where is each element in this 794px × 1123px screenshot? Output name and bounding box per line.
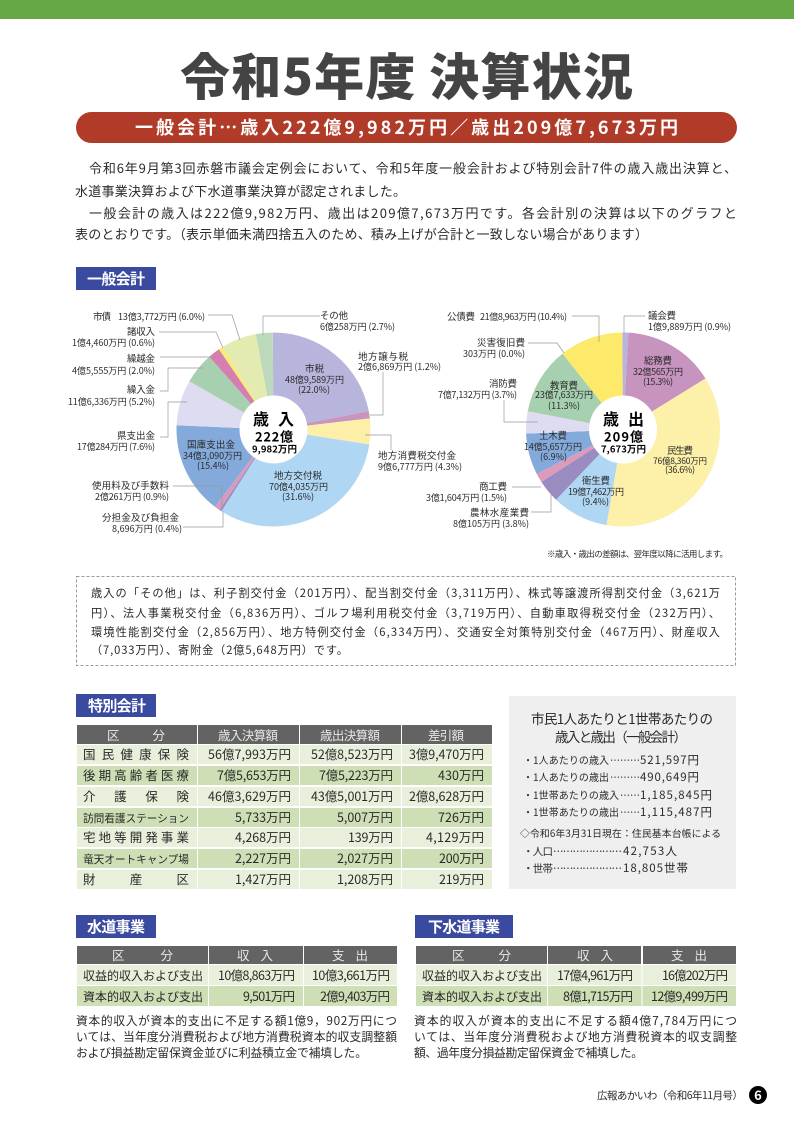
expenditure labels: 8億105万円 (3.8%)	[453, 517, 529, 530]
table: special accounts: 宅 地 等 開 発 事 業	[83, 827, 189, 846]
expenditure labels: 303万円 (0.0%)	[463, 347, 525, 360]
expenditure labels: 農林水産業費	[470, 505, 529, 519]
table: special accounts: 4,129万円	[426, 827, 484, 846]
table: special accounts: 区 分	[107, 725, 165, 744]
table: special accounts: 219万円	[439, 869, 484, 888]
table: special accounts: 国 民 健 康 保 険	[83, 744, 189, 763]
note box: other revenue: 環境性能割交付金（2,856万円）、地方特例交付金（6,334万円）、交通安全対策特別交付金（467万円）、財産収入	[91, 624, 720, 640]
table: water works	[77, 945, 397, 1006]
expenditure labels	[426, 308, 731, 530]
panel: per capita figures: ……	[620, 787, 640, 802]
sewer works note: 資本的収入が資本的支出に不足する額4億7,784万円につ	[414, 1012, 737, 1029]
expenditure labels: (15.3%)	[643, 375, 673, 388]
panel: per capita figures: ・1世帯あたりの歳出	[523, 804, 619, 819]
panel: per capita figures: …………………	[553, 861, 622, 876]
table: water works: 9,501万円	[243, 986, 295, 1005]
table: special accounts: 43億5,001万円	[311, 786, 393, 805]
panel: per capita figures: 歳入と歳出（一般会計）	[555, 726, 687, 746]
revenue labels: 市債	[93, 309, 111, 323]
table: special accounts: 52億8,523万円	[311, 744, 393, 763]
panel: per capita figures: ・1人あたりの歳出	[523, 769, 609, 784]
expenditure labels: 3億1,604万円 (1.5%)	[426, 491, 507, 504]
expenditure labels: 教育費	[550, 378, 578, 392]
expenditure labels: 76億8,360万円	[653, 455, 707, 467]
table: water works: 10億8,863万円	[218, 965, 295, 984]
revenue labels: その他	[320, 308, 348, 322]
table: sewer works: 17億4,961万円	[557, 965, 633, 984]
intro text	[75, 158, 737, 243]
intro text: 令和6年9月第3回赤磐市議会定例会において、令和5年度一般会計および特別会計7件の歳入歳出決算と、	[89, 158, 737, 177]
revenue labels: 9億6,777万円 (4.3%)	[378, 460, 462, 473]
expenditure labels: 32億565万円	[633, 365, 683, 378]
table: special accounts: 56億7,993万円	[208, 744, 291, 763]
revenue centre total: 歳 入	[253, 406, 294, 430]
expenditure centre total	[601, 406, 646, 456]
table: water works: 収 入	[237, 945, 273, 964]
panel: per capita figures: 42,753人	[623, 843, 678, 859]
panel: per capita figures	[509, 696, 736, 889]
revenue labels: 繰越金	[127, 351, 155, 365]
table: water works: 区 分	[112, 945, 173, 964]
expenditure labels: 公債費	[447, 309, 475, 323]
expenditure labels: 議会費	[648, 308, 676, 322]
revenue labels: 34億3,090万円	[183, 449, 242, 462]
expenditure labels: 21億8,963万円 (10.4%)	[480, 310, 567, 323]
table: sewer works: 区 分	[452, 945, 511, 964]
intro text: 表のとおりです。（表示単価未満四捨五入のため、積み上げが合計と一致しない場合があります）	[75, 224, 648, 243]
table: special accounts: 差引額	[428, 725, 464, 744]
revenue labels: 2億6,869万円 (1.2%)	[358, 360, 441, 373]
table: special accounts: 46億3,629万円	[208, 786, 291, 805]
panel: per capita figures: ……	[620, 804, 640, 819]
table: special accounts: 4,268万円	[235, 827, 291, 846]
heading: sewer works: 下水道事業	[428, 916, 500, 937]
revenue labels: 繰入金	[127, 382, 155, 396]
table: special accounts: 7億5,223万円	[319, 765, 393, 784]
revenue labels: 4億5,555万円 (2.0%)	[72, 364, 155, 377]
table: special accounts: 726万円	[438, 807, 484, 826]
summary banner	[76, 112, 737, 143]
water works note	[76, 1012, 397, 1061]
panel: per capita figures: …………………	[553, 844, 622, 859]
expenditure labels: 商工費	[479, 479, 507, 493]
revenue labels: 地方譲与税	[358, 349, 408, 363]
expenditure labels: 19億7,462万円	[568, 485, 624, 498]
heading: water works: 水道事業	[87, 916, 145, 937]
water works note: 資本的収入が資本的支出に不足する額1億9，902万円につ	[76, 1012, 397, 1029]
panel: per capita figures: ・1世帯あたりの歳入	[523, 787, 619, 802]
table: water works: 10億3,661万円	[312, 965, 390, 984]
heading: special accounts: 特別会計	[88, 695, 146, 716]
note box: other revenue	[76, 576, 736, 666]
revenue labels: 48億9,589万円	[285, 373, 344, 386]
top green band	[0, 0, 794, 19]
sewer works note	[414, 1012, 737, 1061]
revenue labels	[68, 308, 462, 535]
sewer works note: いては、当年度分消費税および地方消費税資本的収支調整	[414, 1028, 737, 1045]
revenue labels: (31.6%)	[282, 490, 314, 503]
heading: special accounts	[76, 694, 156, 717]
expenditure labels: 23億7,633万円	[535, 388, 593, 401]
panel: per capita figures: 1,115,487円	[640, 804, 712, 820]
heading: general account: 一般会計	[87, 268, 145, 289]
expenditure centre total: 歳 出	[603, 406, 644, 430]
table: special accounts: 200万円	[439, 848, 484, 867]
panel: per capita figures: 1,185,845円	[640, 787, 712, 803]
expenditure labels: 消防費	[489, 376, 517, 390]
expenditure labels: (9.4%)	[582, 495, 609, 508]
heading: water works	[76, 915, 156, 938]
panel: per capita figures: ………	[610, 752, 640, 767]
table: special accounts: 2億8,628万円	[409, 786, 484, 805]
table: sewer works: 8億1,715万円	[563, 986, 633, 1005]
intro text: 水道事業決算および下水道事業決算が認定されました。	[75, 181, 406, 200]
expenditure labels: (6.9%)	[540, 450, 567, 463]
table: water works: 資本的収入および支出	[83, 988, 203, 1005]
panel: per capita figures: 市民1人あたりと1世帯あたりの	[531, 708, 713, 728]
revenue labels: 1億4,460万円 (0.6%)	[72, 336, 155, 349]
expenditure labels: 7億7,132万円 (3.7%)	[438, 388, 517, 401]
expenditure centre total: 7,673万円	[601, 442, 646, 456]
revenue labels: 諸収入	[127, 324, 155, 338]
table: special accounts: 5,007万円	[337, 807, 393, 826]
expenditure labels: 1億9,889万円 (0.9%)	[648, 320, 731, 333]
heading: general account	[76, 267, 156, 290]
table: special accounts: 5,733万円	[235, 807, 291, 826]
revenue labels: 11億6,336万円 (5.2%)	[68, 395, 155, 408]
table: special accounts: 430万円	[438, 765, 484, 784]
table: special accounts: 7億5,653万円	[217, 765, 291, 784]
title: 令和5年度 決算状況	[180, 38, 633, 110]
table: special accounts: 財 産 区	[83, 869, 189, 888]
expenditure labels: (11.3%)	[548, 399, 580, 412]
page number badge	[749, 1085, 767, 1104]
water works note: いては、当年度分消費税および地方消費税資本的収支調整額	[76, 1028, 397, 1045]
revenue labels: 分担金及び負担金	[102, 510, 179, 524]
revenue labels: (15.4%)	[197, 459, 229, 472]
revenue labels: 2億261万円 (0.9%)	[95, 490, 169, 503]
panel: per capita figures: 490,649円	[640, 769, 699, 785]
expenditure labels: 土木費	[539, 428, 567, 442]
revenue leader lines	[159, 315, 391, 527]
revenue labels: 地方消費税交付金	[378, 448, 456, 462]
revenue labels: 市税	[305, 361, 324, 375]
chart footnote: ※歳入・歳出の差額は、翌年度以降に活用します。	[547, 548, 728, 560]
revenue labels: 国庫支出金	[187, 437, 235, 451]
water works note: および損益勘定留保資金並びに利益積立金で補填した。	[76, 1044, 367, 1061]
table: sewer works: 12億9,499万円	[651, 986, 728, 1005]
table: sewer works: 16億202万円	[662, 965, 728, 984]
panel: per capita figures: ◇令和6年3月31日現在：住民基本台帳による	[520, 826, 721, 840]
table: sewer works	[416, 945, 736, 1006]
summary banner: 一般会計…歳入222億9,982万円／歳出209億7,673万円	[135, 114, 678, 140]
page number badge: 6	[754, 1085, 762, 1104]
table: special accounts	[77, 725, 492, 889]
revenue labels: 70億4,035万円	[269, 480, 328, 493]
panel: per capita figures: 18,805世帯	[623, 860, 688, 876]
footer publication name: 広報あかいわ（令和6年11月号）	[597, 1088, 743, 1103]
table: water works: 支 出	[332, 945, 368, 964]
note box: other revenue: （7,033万円）、寄附金（2億5,648万円）です。	[91, 642, 348, 658]
table: special accounts: 1,208万円	[337, 869, 393, 888]
revenue labels: 6億258万円 (2.7%)	[320, 320, 395, 333]
revenue centre total: 9,982万円	[252, 442, 297, 456]
revenue labels: 8,696万円 (0.4%)	[112, 522, 182, 535]
expenditure leader lines	[504, 316, 645, 512]
panel: per capita figures: ・世帯	[523, 861, 553, 876]
table: special accounts: 1,427万円	[235, 869, 291, 888]
note box: other revenue: 歳入の「その他」は、利子割交付金（201万円）、配当割交付金（3,311万円）、株式等譲渡所得割交付金（3,621万	[91, 585, 720, 601]
table: special accounts: 139万円	[348, 827, 393, 846]
panel: per capita figures: ・人口	[523, 844, 553, 859]
table: special accounts: 3億9,470万円	[409, 744, 484, 763]
panel: per capita figures: 521,597円	[640, 752, 699, 768]
expenditure labels: 民生費	[667, 443, 693, 457]
revenue labels: 地方交付税	[274, 468, 322, 482]
table: special accounts: 訪問看護ステーション	[83, 811, 189, 826]
expenditure labels: 総務費	[644, 353, 672, 367]
table: special accounts: 2,227万円	[235, 848, 291, 867]
table: special accounts: 介 護 保 険	[83, 786, 189, 805]
revenue labels: 使用料及び手数料	[92, 478, 169, 492]
table: water works: 収益的収入および支出	[83, 967, 203, 984]
table: special accounts: 歳出決算額	[320, 725, 380, 744]
table: sewer works: 支 出	[671, 945, 707, 964]
table: special accounts: 2,027万円	[337, 848, 393, 867]
table: special accounts: 後 期 高 齢 者 医 療	[83, 765, 189, 784]
intro text: 一般会計の歳入は222億9,982万円、歳出は209億7,673万円です。各会計別の決算は以下のグラフと	[89, 203, 737, 222]
revenue labels: 13億3,772万円 (6.0%)	[118, 310, 205, 323]
revenue labels: (22.0%)	[298, 383, 330, 396]
expenditure labels: 衛生費	[582, 473, 610, 487]
note box: other revenue: 円）、法人事業税交付金（6,836万円）、ゴルフ場利用税交付金（3,719万円）、自動車取得税交付金（232万円）、	[91, 605, 720, 621]
expenditure labels: 災害復旧費	[477, 335, 525, 349]
table: special accounts: 歳入決算額	[218, 725, 278, 744]
table: sewer works: 資本的収入および支出	[422, 988, 542, 1005]
pie chart: expenditure	[558, 364, 688, 495]
table: special accounts: 竜天オートキャンプ場	[83, 852, 189, 867]
table: sewer works: 収益的収入および支出	[422, 967, 542, 984]
revenue labels: 県支出金	[117, 428, 155, 442]
sewer works note: 額、過年度分損益勘定留保資金で補填した。	[414, 1044, 643, 1061]
panel: per capita figures: ・1人あたりの歳入	[523, 752, 609, 767]
table: water works: 2億9,403万円	[320, 986, 390, 1005]
revenue centre total: 222億	[255, 426, 293, 446]
expenditure centre total: 209億	[604, 426, 643, 446]
table: sewer works: 収 入	[577, 945, 613, 964]
heading: sewer works	[415, 915, 513, 938]
revenue centre total	[252, 406, 297, 456]
revenue labels: 17億284万円 (7.6%)	[77, 440, 155, 453]
expenditure labels: 14億5,657万円	[524, 440, 582, 453]
expenditure labels: (36.6%)	[665, 463, 695, 476]
pie chart: revenue	[208, 364, 339, 495]
panel: per capita figures: ………	[610, 769, 640, 784]
